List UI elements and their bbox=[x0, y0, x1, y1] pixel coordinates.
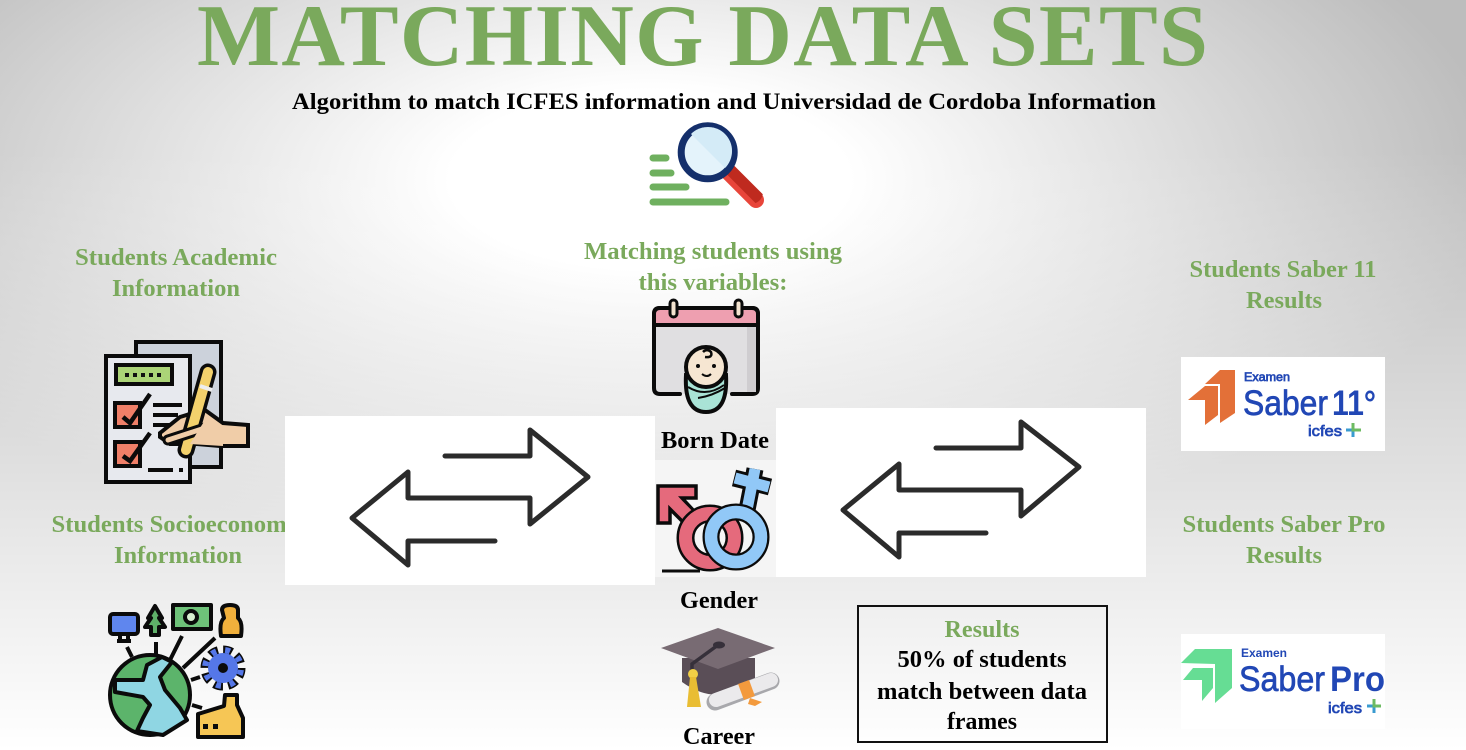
callout: results: frames bbox=[947, 709, 1017, 735]
subtitle: Algorithm to match ICFES information and Universidad de Cordoba Information bbox=[292, 89, 1156, 115]
heading: students saber 11 results: Students Saber 11 bbox=[1190, 257, 1376, 283]
icon: checklist with hand and pencil bbox=[106, 342, 248, 482]
label: career: Career bbox=[683, 724, 755, 750]
callout: results: match between data bbox=[877, 679, 1087, 705]
icon: graduation cap and diploma bbox=[661, 628, 775, 707]
heading: students saber pro results: Students Saber Pro bbox=[1182, 512, 1386, 538]
icon: calendar with baby bbox=[654, 300, 758, 412]
logo: Examen Saber 11 icfes: Saber bbox=[1243, 384, 1328, 423]
icon: globe with socioeconomic factors bbox=[110, 605, 243, 737]
heading: matching variables: Matching students using bbox=[584, 239, 842, 265]
panel: right two-way arrows bbox=[776, 408, 1146, 577]
heading: students socioeconomic information bbox=[52, 512, 305, 569]
heading: matching variables: this variables: bbox=[638, 270, 788, 296]
logo: Examen Saber Pro icfes bbox=[1181, 634, 1385, 729]
label: gender: Gender bbox=[680, 588, 758, 614]
heading: students saber pro results bbox=[1182, 512, 1386, 569]
panel: left two-way arrows bbox=[285, 416, 655, 585]
heading: students academic information: Information bbox=[112, 276, 240, 302]
logo: Examen Saber Pro icfes: Examen bbox=[1241, 648, 1287, 660]
heading: students academic information bbox=[75, 245, 277, 302]
logo: Examen Saber Pro icfes: Pro bbox=[1330, 660, 1385, 699]
callout: results: Results bbox=[944, 617, 1020, 643]
callout: results bbox=[858, 606, 1107, 742]
icon: gender symbols bbox=[655, 460, 776, 577]
logo: Examen Saber Pro icfes: Saber bbox=[1239, 660, 1325, 699]
heading: matching variables bbox=[584, 239, 842, 296]
logo: Examen Saber 11 icfes: 11° bbox=[1332, 384, 1376, 423]
logo: Examen Saber Pro icfes: icfes bbox=[1328, 700, 1362, 717]
logo: Examen Saber 11 icfes bbox=[1181, 357, 1385, 451]
heading: students saber 11 results: Results bbox=[1246, 288, 1322, 314]
callout: results: 50% of students bbox=[898, 647, 1066, 673]
heading: students academic information: Students Academic bbox=[75, 245, 277, 271]
label: born date: Born Date bbox=[661, 428, 769, 454]
logo: Examen Saber 11 icfes: Examen bbox=[1244, 372, 1290, 384]
heading: students saber pro results: Results bbox=[1246, 543, 1322, 569]
heading: students socioeconomic information: Information bbox=[114, 543, 242, 569]
heading: students socioeconomic information: Students Socioeconomic bbox=[52, 512, 305, 538]
icon: magnifying glass over text lines bbox=[653, 126, 760, 202]
logo: Examen Saber 11 icfes: icfes bbox=[1308, 423, 1342, 440]
heading: students saber 11 results bbox=[1190, 257, 1376, 314]
